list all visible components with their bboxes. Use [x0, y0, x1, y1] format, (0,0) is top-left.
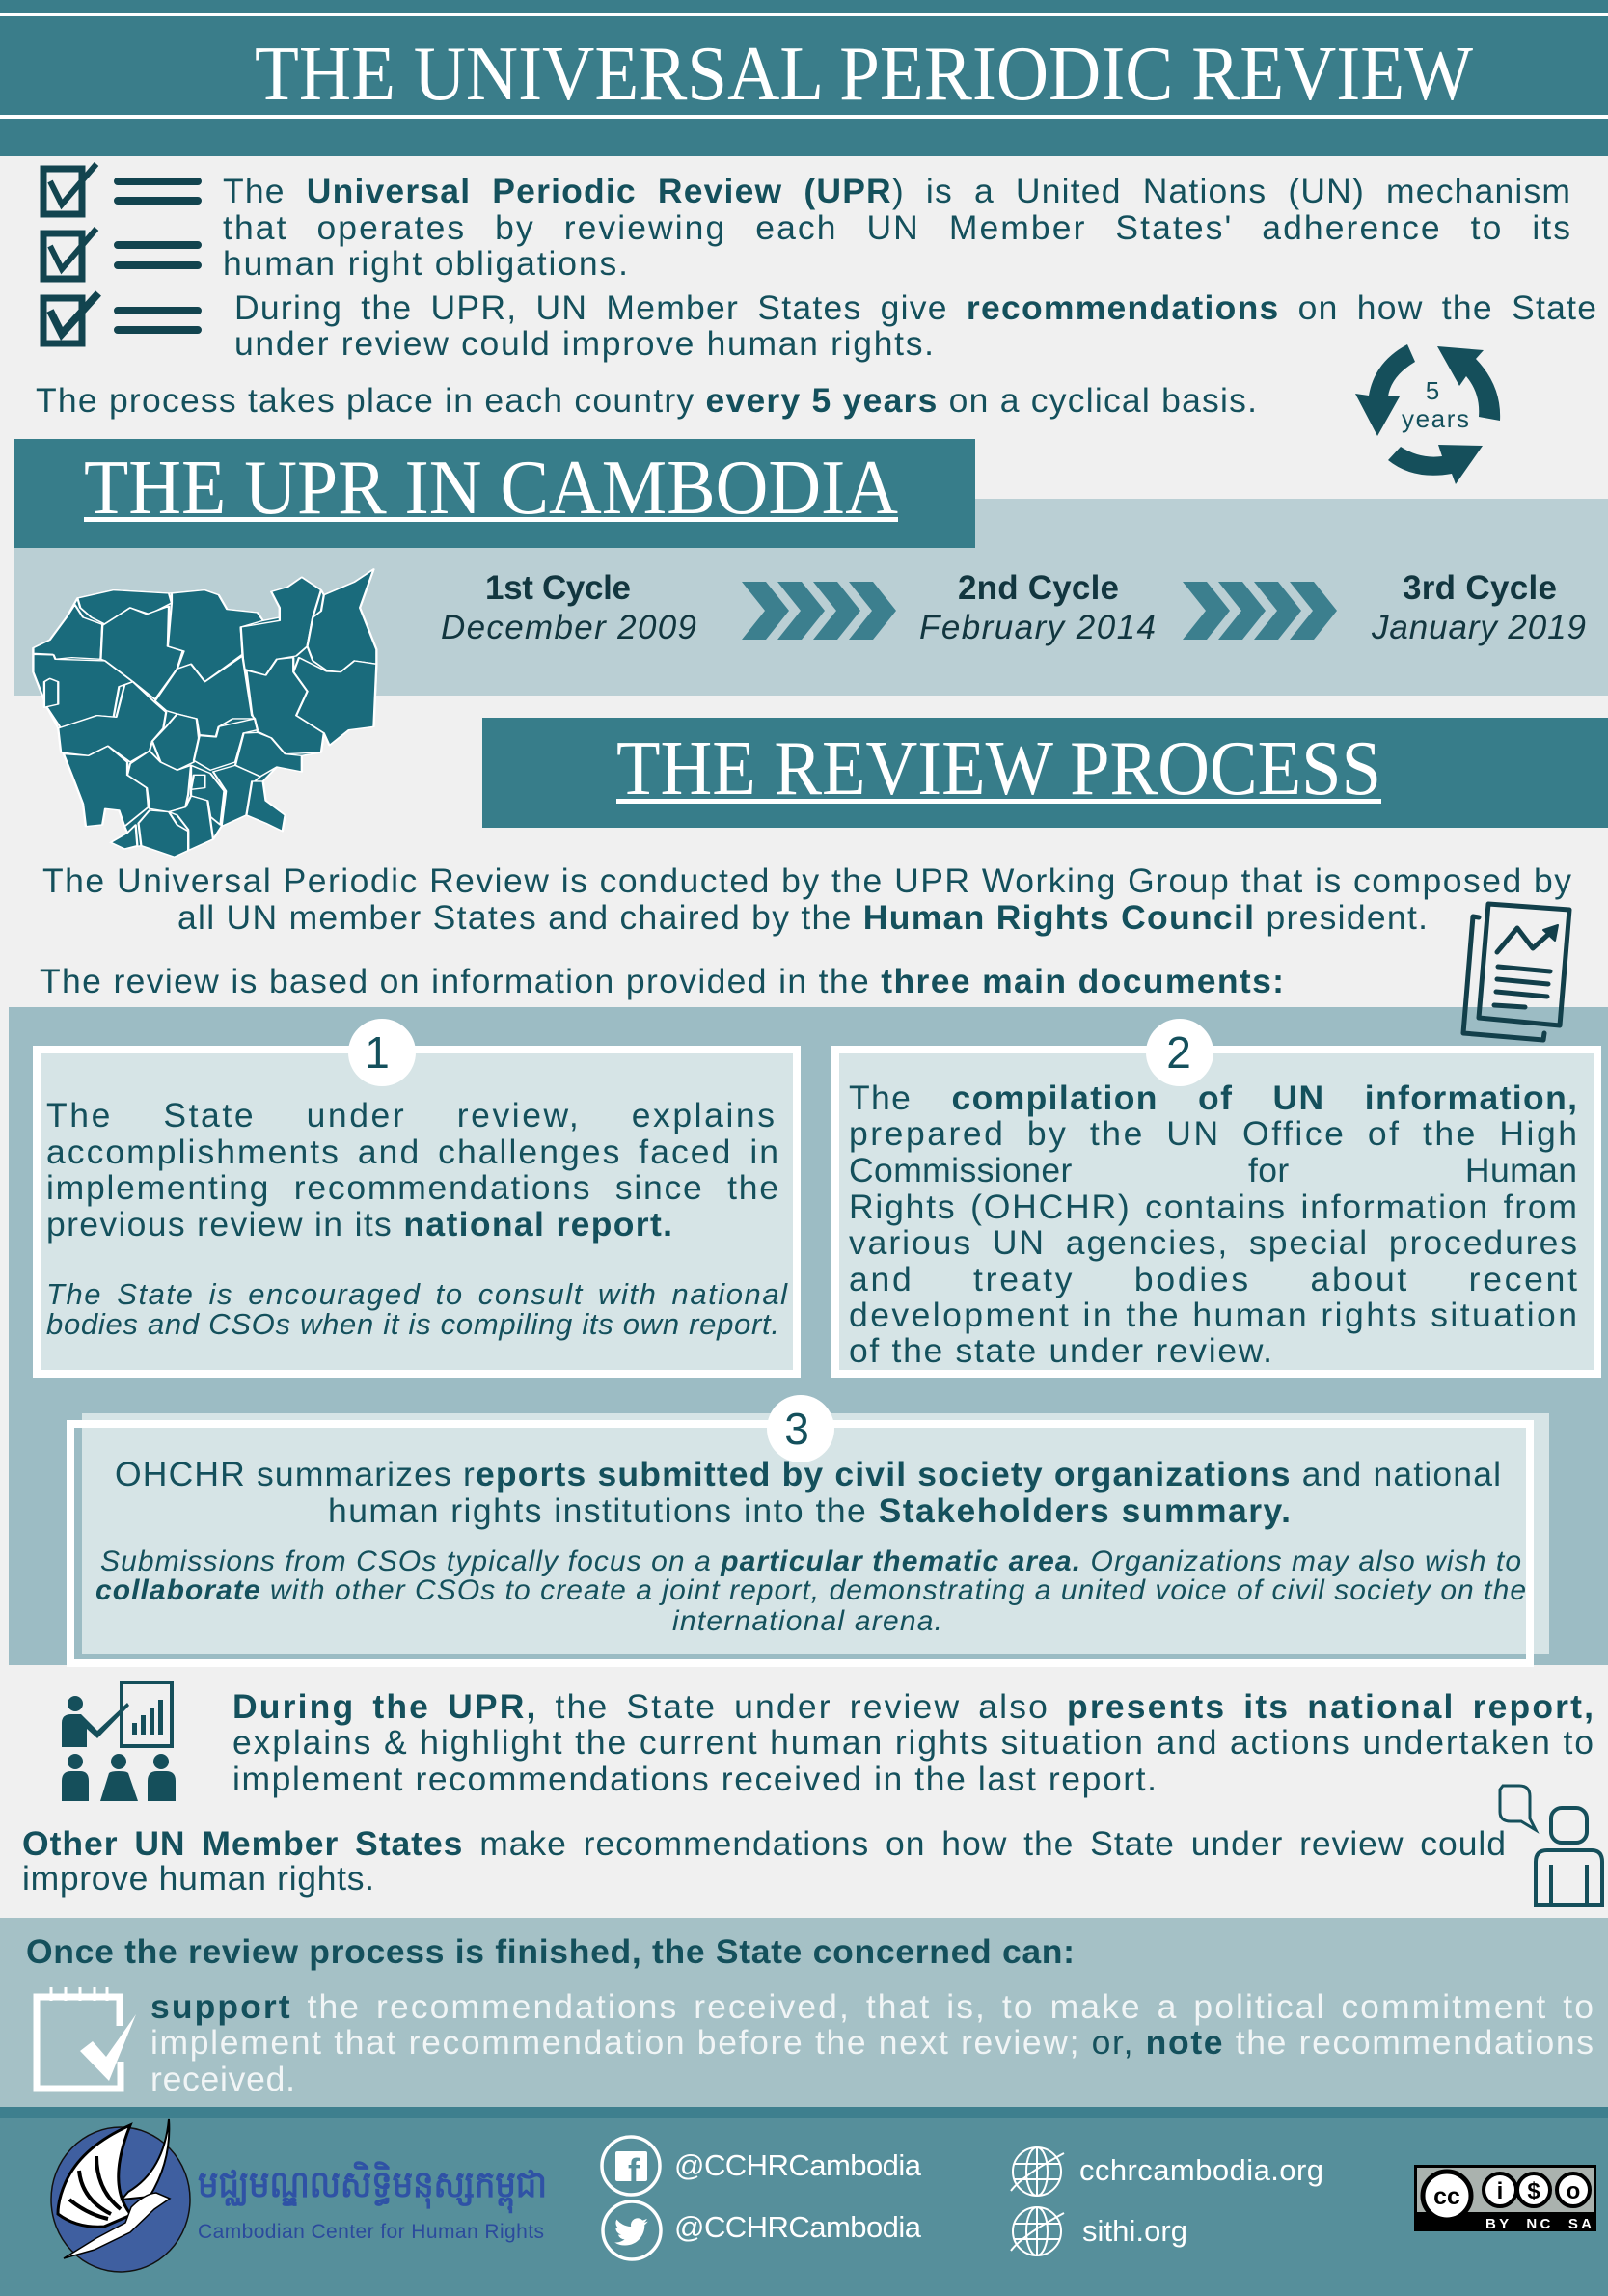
- panel: after the review: received.: [150, 2060, 295, 2098]
- box 3: stakeholders summary: 3: [784, 1404, 809, 1454]
- text: UPR introduction: [223, 172, 1596, 363]
- text: sithi website: sithi.org: [1082, 2214, 1187, 2248]
- text: review description: [40, 861, 1571, 1000]
- cycle 1: [441, 569, 696, 646]
- cycle 3: January 2019: [1371, 609, 1586, 646]
- text: other member states: [22, 1824, 1506, 1898]
- text: five-year cycle: The process takes place in each country every 5 years on a cyclical basis.: [36, 381, 1257, 420]
- panel: after the review: [0, 1918, 1608, 2107]
- icon: facebook: [602, 2137, 660, 2195]
- title: THE UNIVERSAL PERIODIC REVIEW: [255, 32, 1473, 117]
- icon: 5 years cycle arrows: [1355, 344, 1500, 484]
- icon: 5 years cycle arrows: years: [1402, 404, 1469, 433]
- box 1: national report: accomplishments and challenges faced in: [46, 1133, 778, 1171]
- cycle 1: 1st Cycle: [485, 569, 631, 607]
- badge: creative commons: cc: [1433, 2183, 1460, 2210]
- box 2: compilation of UN information: various UN agencies, special procedures: [849, 1223, 1577, 1262]
- box 3: stakeholders summary: OHCHR summarizes reports submitted by civil society organizations and national: [115, 1455, 1501, 1493]
- heading: the review process: [482, 718, 1608, 828]
- box 3: stakeholders summary: [70, 1395, 1549, 1663]
- box 2: compilation of UN information: prepared by the UN Office of the High: [849, 1114, 1577, 1153]
- box 1: national report: bodies and CSOs when it is compiling its own report.: [46, 1307, 779, 1341]
- text: presentation during UPR: During the UPR, the State under review also presents its national report,: [232, 1687, 1594, 1726]
- text: UPR introduction: During the UPR, UN Member States give recommendations on how the State: [234, 288, 1596, 327]
- box 3: stakeholders summary: Submissions from CSOs typically focus on a particular thematic area. Organizations may also wish to: [100, 1545, 1521, 1577]
- heading: the UPR in Cambodia: THE UPR IN CAMBODIA: [84, 446, 898, 531]
- text: other member states: Other UN Member States make recommendations on how the State under review could: [22, 1824, 1506, 1863]
- text: cchr website: cchrcambodia.org: [1079, 2153, 1323, 2187]
- icon: globe sithi: [1011, 2207, 1064, 2255]
- badge: creative commons: o: [1567, 2178, 1580, 2204]
- icon: clipboard check: [37, 1987, 136, 2089]
- text: facebook handle: @CCHRCambodia: [674, 2148, 922, 2182]
- panel: after the review: implement that recommendation before the next review; or, note the recommendations: [150, 2023, 1594, 2062]
- logo: CCHR: [51, 2119, 547, 2272]
- arrow: chevrons 1 to 2: [742, 582, 896, 640]
- cycle 1: December 2009: [441, 609, 696, 646]
- text: presentation during UPR: explains & highlight the current human rights situation and actions undertaken to: [232, 1723, 1594, 1762]
- heading: the UPR in Cambodia: [14, 439, 975, 548]
- logo: CCHR: Cambodian Center for Human Rights: [198, 2221, 544, 2243]
- cycle 2: February 2014: [919, 609, 1156, 646]
- box 3: stakeholders summary: collaborate with other CSOs to create a joint report, demonstrating a united voice of civil society on the: [95, 1574, 1526, 1606]
- box 2: compilation of UN information: and treaty bodies about recent: [849, 1260, 1577, 1298]
- box 2: compilation of UN information: Rights (OHCHR) contains information from: [849, 1188, 1577, 1226]
- text: review description: The review is based on information provided in the three main documents:: [40, 962, 1284, 1000]
- text: UPR introduction: human right obligations.: [223, 244, 628, 283]
- badge: creative commons: BY NC SA: [1485, 2216, 1592, 2232]
- icon: checklist: [43, 164, 198, 343]
- text: other member states: improve human rights.: [22, 1859, 374, 1898]
- box 2: compilation of UN information: 2: [1166, 1027, 1191, 1078]
- heading: the review process: THE REVIEW PROCESS: [616, 726, 1381, 811]
- text: UPR introduction: under review could improve human rights.: [234, 324, 934, 363]
- title banner: [0, 0, 1608, 156]
- icon: 5 years cycle arrows: 5: [1426, 376, 1439, 405]
- icon: speaking person: [1500, 1786, 1602, 1905]
- icon: twitter: [603, 2201, 661, 2259]
- box 1: national report: implementing recommendations since the: [46, 1168, 778, 1207]
- box 1: national report: The State is encouraged to consult with national: [46, 1277, 788, 1311]
- panel: three main documents: [9, 1007, 1608, 1665]
- cycle 3: [1371, 569, 1586, 646]
- box 2: compilation of UN information: development in the human rights situation: [849, 1296, 1577, 1334]
- panel: after the review: support the recommendations received, that is, to make a political commitment to: [150, 1987, 1594, 2026]
- box 2: compilation of UN information: Commissioner for Human: [849, 1151, 1577, 1189]
- box 1: national report: previous review in its national report.: [46, 1205, 672, 1244]
- badge: creative commons: [1414, 2165, 1596, 2232]
- badge: creative commons: i: [1497, 2178, 1503, 2204]
- arrow: chevrons 2 to 3: [1183, 582, 1337, 640]
- box 2: compilation of UN information: The compilation of UN information,: [849, 1079, 1577, 1117]
- box 2: compilation of UN information: of the state under review.: [849, 1331, 1272, 1370]
- cycle 3: 3rd Cycle: [1403, 569, 1557, 607]
- icon: facebook: f: [628, 2151, 640, 2191]
- panel: cycle timeline band: [14, 499, 1608, 696]
- map of Cambodia: [33, 569, 376, 857]
- icon: presenter and audience: [62, 1682, 176, 1801]
- cycle 2: 2nd Cycle: [958, 569, 1119, 607]
- box 1: national report: The State under review, explains: [46, 1096, 775, 1134]
- text: presentation during UPR: implement recommendations received in the last report.: [232, 1760, 1157, 1798]
- box 2: compilation of UN information: [835, 1019, 1597, 1374]
- badge: creative commons: $: [1527, 2178, 1540, 2204]
- text: review description: all UN member States and chaired by the Human Rights Council president.: [177, 898, 1428, 937]
- text: review description: The Universal Periodic Review is conducted by the UPR Working Group that is composed by: [42, 861, 1571, 900]
- text: UPR introduction: The Universal Periodic Review (UPR) is a United Nations (UN) mechanism: [223, 172, 1570, 210]
- panel: footer: [0, 2107, 1608, 2296]
- panel: after the review: Once the review process is finished, the State concerned can:: [26, 1932, 1075, 1971]
- cycle 2: [919, 569, 1156, 646]
- text: UPR introduction: that operates by reviewing each UN Member States' adherence to its: [223, 208, 1570, 247]
- text: presentation during UPR: [232, 1687, 1594, 1798]
- box 3: stakeholders summary: human rights institutions into the Stakeholders summary.: [328, 1491, 1291, 1530]
- text: twitter handle: @CCHRCambodia: [674, 2210, 922, 2244]
- icon: globe website: [1011, 2147, 1064, 2196]
- logo: CCHR: មជ្ឈមណ្ឌលសិទ្ធិមនុស្សកម្ពុជា: [198, 2161, 547, 2214]
- box 3: stakeholders summary: international arena.: [672, 1605, 942, 1637]
- box 1: national report: 1: [365, 1027, 390, 1078]
- icon: documents: [1463, 904, 1569, 1040]
- box 1: national report: [37, 1019, 797, 1374]
